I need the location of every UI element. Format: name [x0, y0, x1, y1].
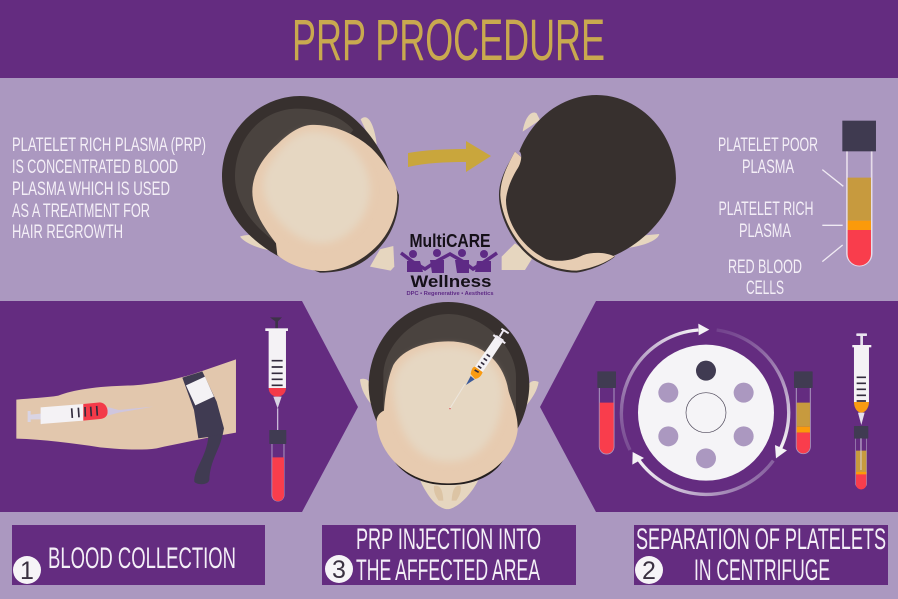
test tube labels: PLASMA — [742, 157, 794, 178]
panel: blood collection — [0, 301, 358, 512]
tube: whole blood — [597, 371, 616, 454]
test tube labels: RED BLOOD — [728, 257, 802, 278]
header band — [0, 0, 898, 78]
arrow: before to after — [408, 141, 491, 172]
test tube labels — [718, 135, 818, 299]
illustration: syringe extracting plasma — [852, 333, 871, 489]
step number 3 — [325, 555, 353, 584]
intro text block: PLASMA WHICH IS USED — [12, 179, 170, 200]
step number 3: 3 — [332, 556, 346, 584]
heading — [356, 523, 541, 587]
label: step 2 separation — [634, 523, 888, 587]
test tube labels: PLASMA — [739, 221, 791, 242]
illustration: centrifuge rotor and tubes — [597, 324, 813, 494]
heading: THE AFFECTED AREA — [356, 554, 540, 587]
intro text block: AS A TREATMENT FOR — [12, 201, 150, 222]
test tube labels: PLATELET POOR — [718, 135, 818, 156]
intro text block: PLATELET RICH PLASMA (PRP) — [12, 135, 206, 156]
title: PRP PROCEDURE — [292, 8, 605, 73]
syringe — [449, 329, 509, 409]
panel: centrifuge — [540, 301, 898, 512]
tube: separated blood — [794, 371, 813, 454]
test tube labels: PLATELET RICH — [718, 199, 814, 220]
heading — [636, 523, 886, 587]
illustration: head receiving PRP injection — [360, 302, 539, 509]
heading: BLOOD COLLECTION — [48, 542, 236, 575]
step number 2 — [635, 556, 663, 585]
logo: MultiCARE Wellness: MultiCARE — [410, 231, 490, 251]
logo: MultiCARE Wellness: DPC • Regenerative • Aesthetics — [406, 291, 494, 297]
label: step 1 blood collection — [12, 525, 265, 585]
intro text block: HAIR REGROWTH — [12, 222, 123, 243]
intro text block: IS CONCENTRATED BLOOD — [12, 157, 178, 178]
test tube diagram — [822, 121, 876, 266]
intro text block — [12, 135, 206, 243]
logo: MultiCARE Wellness: Wellness — [410, 272, 492, 291]
illustration: syringe drawing into tube — [265, 317, 288, 501]
heading: PRP INJECTION INTO — [356, 523, 541, 556]
test tube labels: CELLS — [746, 278, 784, 299]
illustration: arm with tourniquet and syringe — [16, 359, 236, 484]
step number 2: 2 — [642, 557, 656, 585]
label: step 3 PRP injection — [322, 523, 576, 587]
step number 1: 1 — [20, 557, 34, 585]
step number 1 — [13, 556, 41, 585]
logo: MultiCARE Wellness — [401, 231, 497, 297]
illustration: full hair after treatment — [499, 95, 676, 273]
illustration: balding head before treatment — [222, 96, 399, 273]
four figures — [401, 249, 497, 273]
